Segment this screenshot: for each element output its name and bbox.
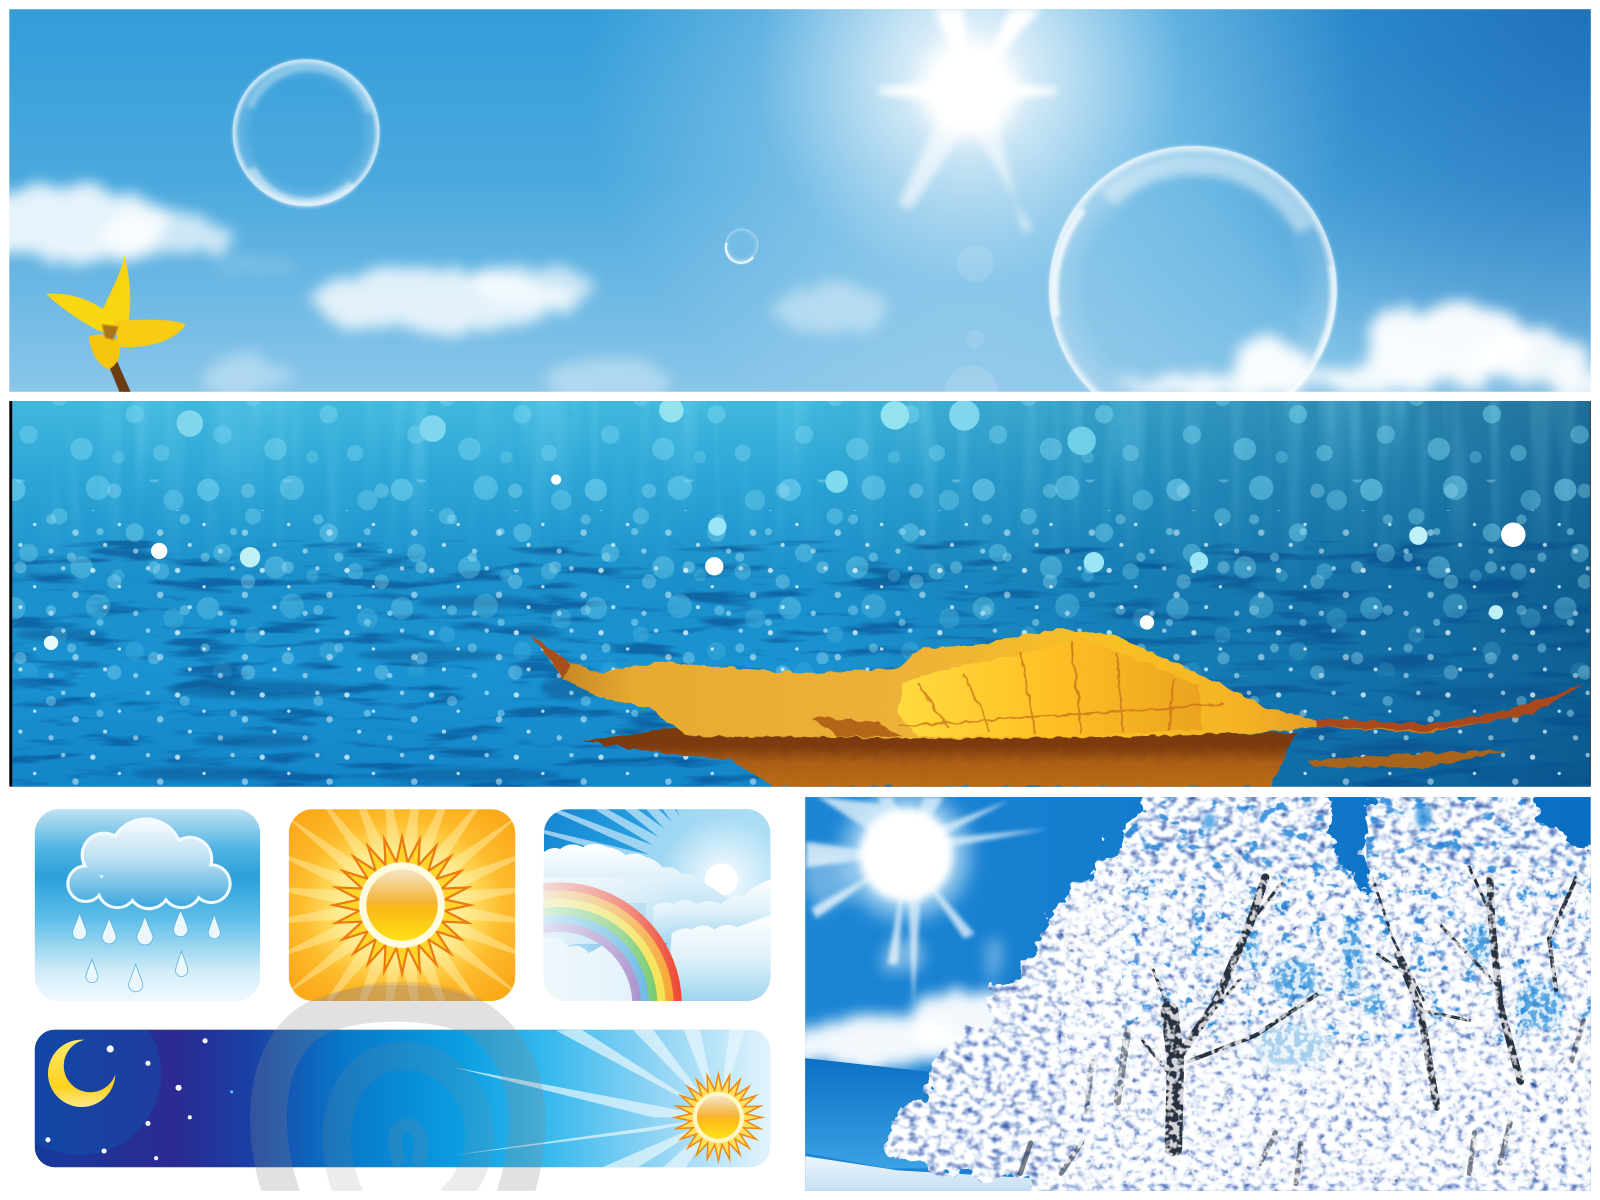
icon: yellow flower	[46, 255, 186, 392]
faint lens flares	[945, 245, 998, 392]
moon halo	[0, 992, 161, 1155]
water ripples	[12, 541, 1592, 787]
watermark: grey spiral	[268, 1003, 527, 1200]
icon: rainbow tile	[441, 605, 997, 1154]
sky gaps through branches	[1122, 797, 1592, 1066]
panel: sunny sky with bubbles	[9, 9, 1591, 392]
icon: sun with rays	[880, 9, 1056, 233]
sun rays	[454, 1030, 745, 1167]
light rays	[448, 605, 997, 1154]
light streaks	[73, 401, 1576, 547]
bubble large	[1047, 144, 1339, 392]
clouds	[791, 847, 1026, 1069]
icon: autumn leaf	[531, 630, 1582, 739]
ground snow	[805, 1156, 1041, 1191]
frost sparkle over trunks	[1061, 867, 1592, 1184]
tree trunks and branches	[1020, 867, 1584, 1184]
icon: night to day banner	[0, 992, 770, 1167]
icon: winter sun	[806, 792, 1049, 1005]
icon: crescent moon	[48, 1040, 115, 1107]
bokeh raindrops	[12, 398, 1590, 787]
icon: sun tile	[288, 809, 516, 1001]
sun spikes	[327, 830, 477, 980]
clouds	[544, 844, 770, 1002]
stars	[45, 1038, 208, 1160]
panel: rain on water with leaf	[9, 398, 1592, 787]
panel: winter trees under blue sky	[791, 786, 1600, 1200]
icon: small sun	[670, 1069, 766, 1165]
sun rays	[289, 809, 515, 1001]
distant hill	[805, 1058, 944, 1168]
cloud	[66, 817, 232, 910]
sun ball	[359, 862, 445, 948]
frosted tree canopies	[886, 786, 1600, 1200]
bubble small	[726, 229, 758, 263]
icon: rain cloud tile	[35, 809, 260, 1001]
leaf reflection	[582, 729, 1510, 787]
rainbow	[441, 887, 678, 1123]
bubble left	[233, 59, 380, 206]
raindrops	[72, 910, 220, 992]
clouds	[0, 186, 1600, 400]
